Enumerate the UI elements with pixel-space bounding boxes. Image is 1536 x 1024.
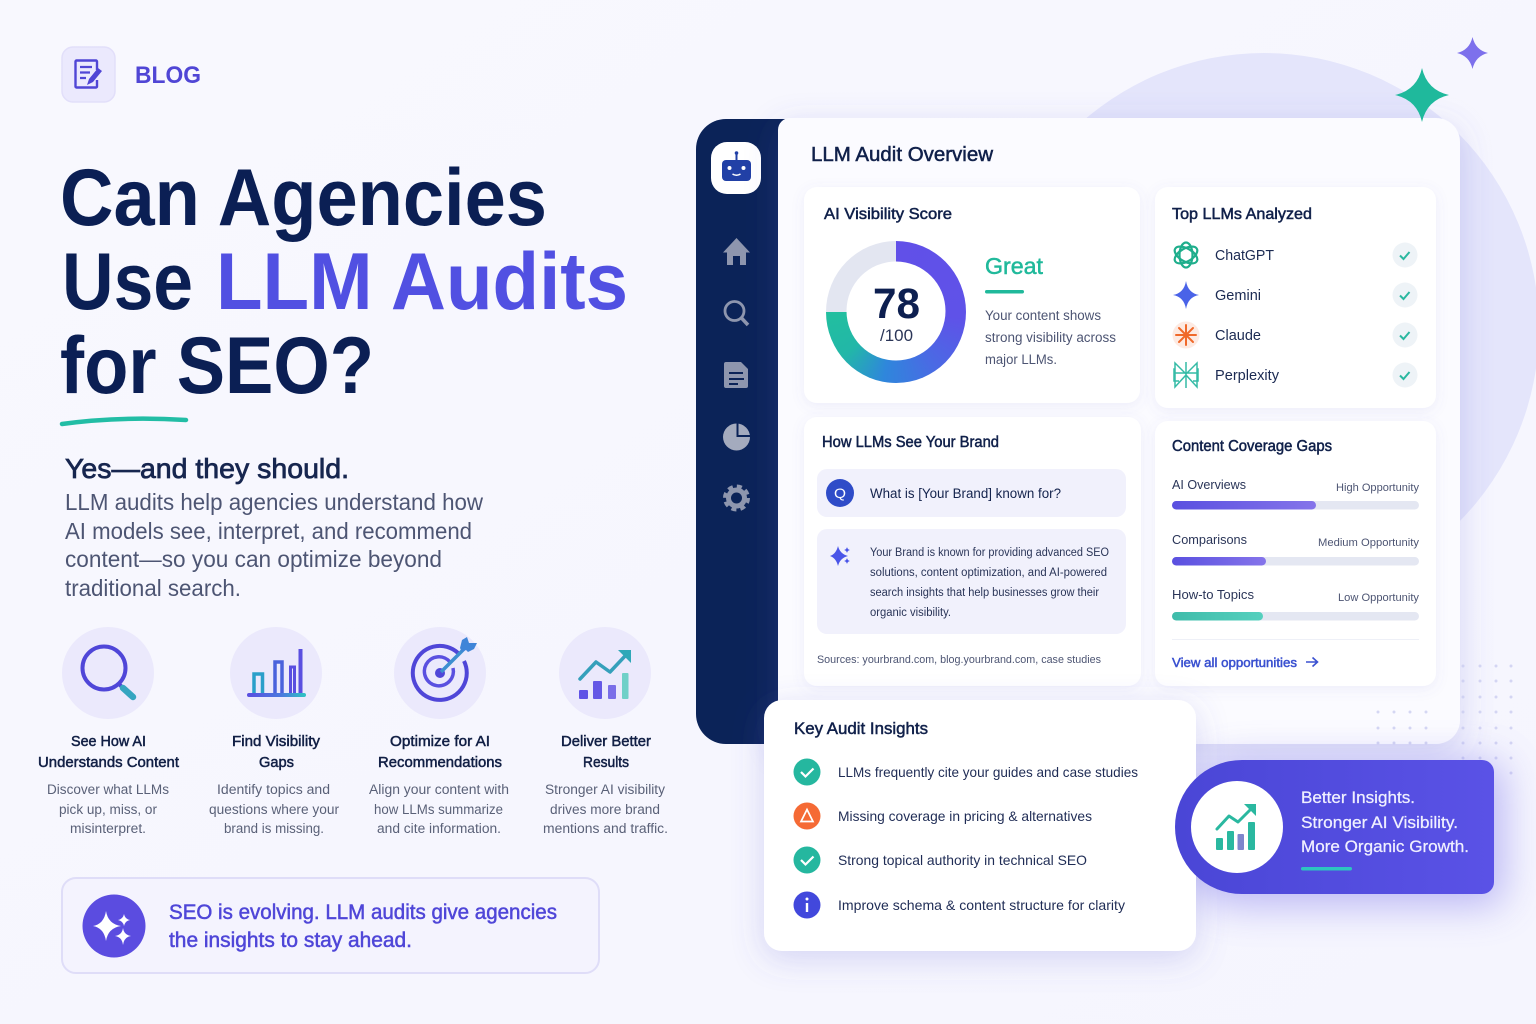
feature: see how AI understands content: See How AI (71, 733, 146, 750)
rating: great: Great (985, 253, 1044, 279)
icon: bar chart (230, 627, 322, 719)
sidebar (696, 119, 792, 744)
chart: donut score: /100 (880, 326, 913, 345)
bar: how-to topics: How-to Topics (1172, 587, 1254, 602)
feature: see how AI understands content: pick up, miss, or (59, 802, 158, 817)
answer box: search insights that help businesses grow their (870, 587, 1099, 599)
title: Can Agencies (60, 153, 547, 243)
intro paragraph: content—so you can optimize beyond (65, 546, 442, 572)
insight: schema: Improve schema & content structure for clarity (838, 897, 1125, 913)
intro paragraph: traditional search. (65, 575, 241, 601)
title: for SEO? (60, 321, 374, 411)
sources: Sources: yourbrand.com, blog.yourbrand.com, case studies (817, 654, 1101, 666)
question row (817, 469, 1126, 517)
panel: key audit insights (764, 700, 1196, 951)
bar: AI overviews (1172, 477, 1419, 510)
icon: growth circle (1191, 781, 1283, 873)
answer box: Your Brand is known for providing advanced SEO (870, 547, 1109, 559)
insight: schema (794, 892, 1125, 918)
question row: Q (834, 485, 846, 501)
icon: teal sparkle (1395, 68, 1449, 122)
score description (985, 308, 1116, 367)
feature: find visibility gaps: Find Visibility (232, 733, 320, 750)
icon: pie chart (723, 422, 752, 450)
panel: content coverage gaps (1155, 421, 1436, 686)
bar: comparisons: Comparisons (1172, 532, 1247, 547)
intro paragraph (65, 489, 483, 601)
panel: AI visibility score: AI Visibility Score (824, 206, 952, 223)
feature: find visibility gaps: questions where your (209, 802, 340, 817)
feature: see how AI understands content: Discover what LLMs (47, 782, 169, 797)
insight: guides (794, 758, 1138, 786)
icon: purple sparkle (1457, 37, 1488, 69)
icon: home (723, 238, 750, 265)
title: Use (62, 237, 193, 327)
insight: missing coverage (794, 802, 1092, 830)
panel: how LLMs see your brand: How LLMs See Your Brand (822, 434, 999, 451)
icon: robot logo (711, 142, 761, 194)
intro paragraph: AI models see, interpret, and recommend (65, 518, 472, 544)
bar: how-to topics: Low Opportunity (1338, 592, 1419, 604)
feature: find visibility gaps: Gaps (259, 754, 294, 771)
subheading: Yes—and they should. (65, 453, 349, 484)
feature: optimize for AI recommendations (369, 627, 509, 836)
feature: deliver better results (543, 627, 668, 836)
decorative dots (1376, 664, 1512, 774)
insight: topical authority: Strong topical authority in technical SEO (838, 852, 1087, 868)
row: Perplexity: Perplexity (1215, 368, 1280, 384)
chart: donut score: 78 (873, 280, 920, 328)
panel: how LLMs see your brand (804, 417, 1141, 686)
intro paragraph: LLM audits help agencies understand how (65, 489, 483, 515)
banner text: Stronger AI Visibility. (1301, 813, 1458, 832)
feature: deliver better results: mentions and traffic. (543, 821, 668, 836)
icon: sparkles (82, 894, 146, 958)
bar: comparisons (1172, 532, 1420, 566)
feature: deliver better results: Stronger AI visibility (545, 782, 665, 797)
rating: great (985, 253, 1044, 294)
answer box: solutions, content optimization, and AI-powered (870, 567, 1107, 579)
panel: content coverage gaps: Content Coverage Gaps (1172, 438, 1332, 455)
feature: deliver better results: Deliver Better (561, 733, 651, 750)
bar: AI overviews: High Opportunity (1336, 482, 1419, 494)
icon: blog badge (62, 47, 115, 102)
row: ChatGPT (1172, 242, 1418, 268)
title underline (62, 419, 186, 424)
icon: document (724, 362, 748, 388)
title (60, 153, 628, 411)
feature: optimize for AI recommendations: how LLMs summarize (374, 802, 503, 817)
banner: better insights (1175, 760, 1494, 894)
panel: top LLMs analyzed (1155, 187, 1436, 408)
row: Claude: Claude (1215, 328, 1261, 344)
feature: find visibility gaps: brand is missing. (224, 821, 324, 836)
title: LLM Audits (216, 237, 628, 327)
panel: AI visibility score (804, 187, 1140, 403)
bar: AI overviews: AI Overviews (1172, 477, 1246, 492)
callout: SEO is evolving: the insights to stay ahead. (169, 929, 412, 952)
panel: key audit insights: Key Audit Insights (794, 719, 928, 738)
feature: optimize for AI recommendations: Recommendations (378, 754, 502, 771)
score description: major LLMs. (985, 352, 1057, 367)
panel: LLM audit overview (778, 118, 1460, 744)
insight: missing coverage: Missing coverage in pricing & alternatives (838, 808, 1092, 824)
feature: find visibility gaps (209, 627, 340, 836)
link: view all opportunities: View all opportunities (1172, 655, 1297, 670)
row: Perplexity (1174, 362, 1418, 388)
banner text (1301, 788, 1469, 856)
insight: topical authority (794, 846, 1087, 874)
question row: What is [Your Brand] known for? (870, 486, 1061, 501)
banner text: Better Insights. (1301, 788, 1415, 807)
feature: optimize for AI recommendations: and cite information. (377, 821, 501, 836)
label: BLOG: BLOG (135, 62, 201, 89)
bar: how-to topics (1172, 587, 1419, 620)
callout: SEO is evolving (62, 878, 599, 973)
answer box: organic visibility. (870, 607, 951, 619)
row: Gemini (1173, 281, 1418, 309)
icon: search (725, 302, 748, 325)
feature: optimize for AI recommendations: Optimize for AI (390, 733, 490, 750)
row: ChatGPT: ChatGPT (1215, 248, 1274, 264)
bar: comparisons: Medium Opportunity (1318, 537, 1420, 549)
heading: overview: LLM Audit Overview (811, 144, 994, 166)
banner text: More Organic Growth. (1301, 837, 1469, 856)
callout: SEO is evolving: SEO is evolving. LLM audits give agencies (169, 901, 557, 924)
icon: magnifier (62, 627, 154, 719)
feature: deliver better results: drives more brand (550, 802, 660, 817)
feature: optimize for AI recommendations: Align your content with (369, 782, 509, 797)
panel: top LLMs analyzed: Top LLMs Analyzed (1172, 206, 1312, 223)
icon: gear (725, 486, 748, 510)
feature: see how AI understands content: Understands Content (38, 754, 180, 771)
answer box (817, 529, 1126, 634)
insight: guides: LLMs frequently cite your guides and case studies (838, 764, 1138, 780)
feature: find visibility gaps: Identify topics and (217, 782, 330, 797)
feature: see how AI understands content: misinterpret. (70, 821, 146, 836)
row: Claude (1172, 322, 1418, 348)
score description: strong visibility across (985, 330, 1116, 345)
row: Gemini: Gemini (1215, 288, 1261, 304)
score description: Your content shows (985, 308, 1101, 323)
icon: growth chart (559, 627, 651, 719)
chart: donut score (826, 241, 966, 383)
feature: see how AI understands content (38, 627, 180, 836)
feature: deliver better results: Results (583, 754, 629, 771)
icon: target (394, 627, 486, 719)
